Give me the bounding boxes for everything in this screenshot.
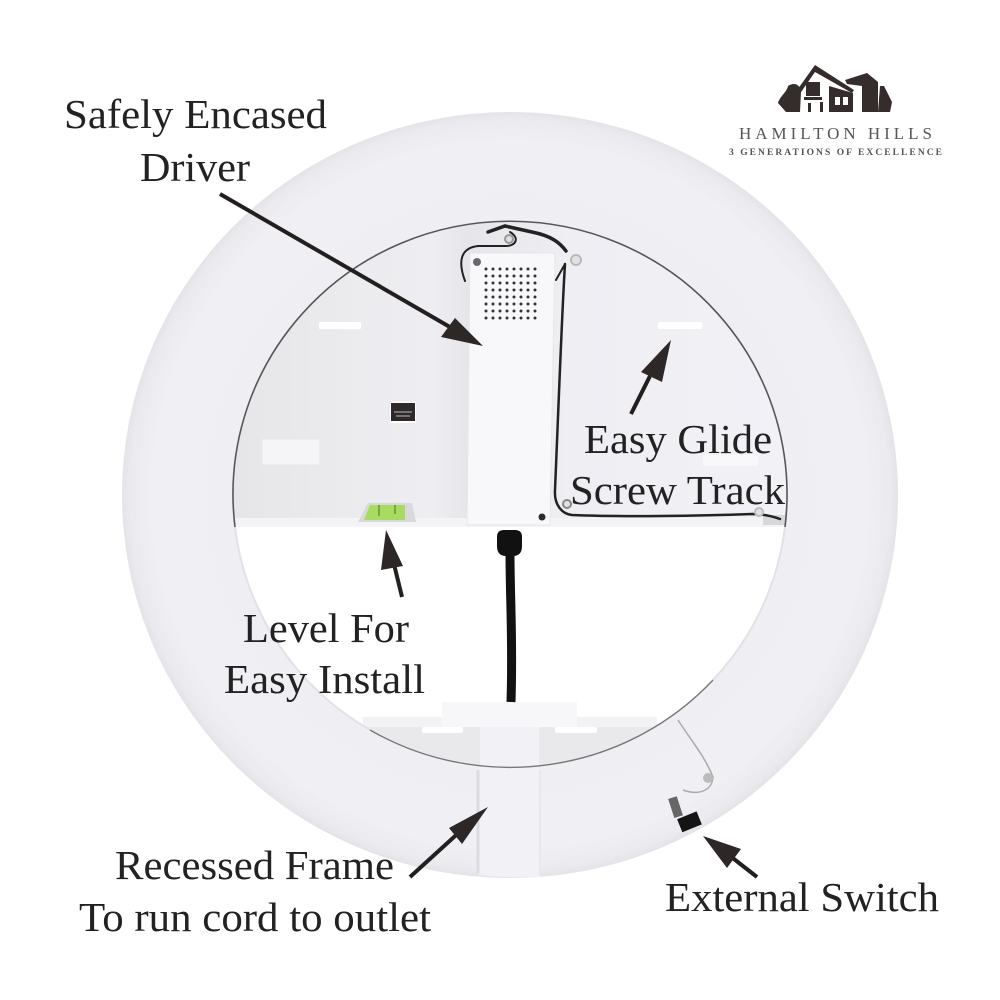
left bracket [262,439,320,465]
callout: recessed frame: Recessed Frame [115,842,394,888]
arrow: to screw track [631,340,671,414]
callout: external switch: External Switch [665,874,939,920]
keyhole slot right [658,322,702,329]
power cord [497,530,522,702]
right bracket [703,455,758,466]
arrow: to recessed frame [410,807,488,877]
panel: light ring back [122,112,898,878]
arrow: to level [381,530,403,597]
callout: safely encased driver: Safely Encased [64,91,327,137]
arrow: to driver [220,194,483,346]
callout: level: Level For [243,605,409,651]
internal wiring [461,226,780,519]
callout: level [224,605,425,702]
arrow: to external switch [703,836,757,877]
driver box [467,253,555,525]
vent holes [486,269,537,318]
callout: recessed frame: To run cord to outlet [79,894,432,940]
keyhole slot left [319,322,361,329]
tagline: 3 GENERATIONS OF EXCELLENCE [729,148,942,158]
recessed cord channel [479,765,540,877]
logo: Hamilton Hills [729,65,942,158]
callout: level: Easy Install [224,656,425,702]
icon: house [778,65,892,112]
callout: recessed frame [79,842,432,940]
label sticker [390,402,416,423]
external switch and wire [668,720,713,832]
infographic canvas [66,65,942,932]
callout: easy glide screw track: Easy Glide [584,416,772,462]
callout: safely encased driver [64,91,327,190]
panel: mounting plate inside the ring [230,215,793,775]
callout: easy glide screw track: Screw Track [570,467,786,513]
callout: safely encased driver: Driver [140,144,250,190]
brand name: HAMILTON HILLS [739,124,932,143]
icon: bubble level [358,503,416,522]
callout: easy glide screw track [570,416,786,513]
